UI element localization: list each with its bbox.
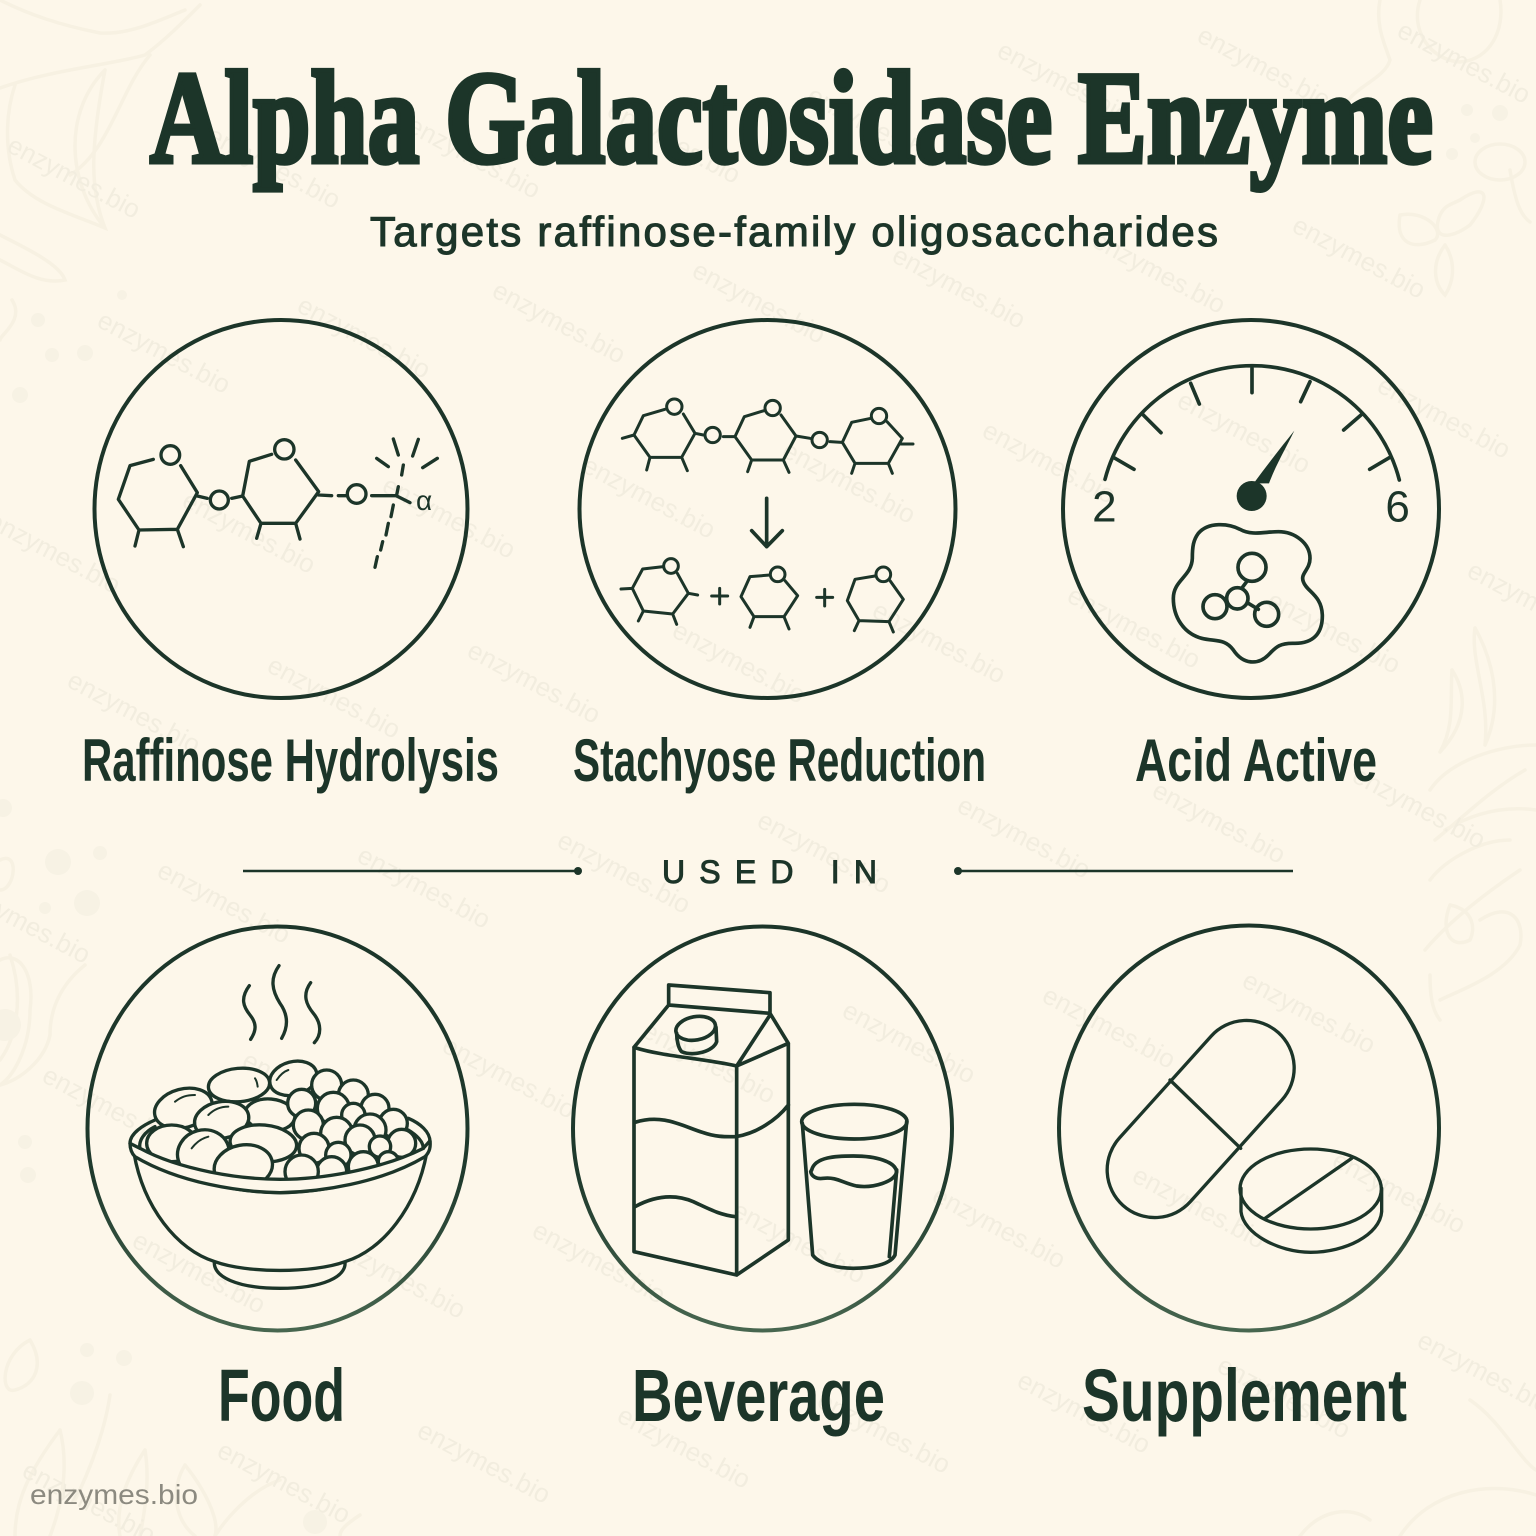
panel: supplement [1059,926,1439,1437]
ring: acid active [1063,320,1439,698]
text: enzymes.bio [578,450,721,545]
text: enzymes.bio [1328,1145,1471,1240]
panel: food [88,926,468,1437]
panel: acid active [1063,320,1439,794]
heading: used in: USED IN [662,854,877,890]
text: enzymes.bio [63,665,206,760]
ring: food [88,926,468,1330]
text: enzymes.bio [3,130,146,225]
divider: used in [243,854,1293,890]
text: enzymes.bio [1238,965,1381,1060]
text: enzymes.bio [1148,775,1291,870]
text: enzymes.bio [803,80,946,175]
text: enzymes.bio [1088,225,1231,320]
text: enzymes.bio [128,1225,271,1320]
text: enzymes.bio [1063,580,1206,675]
text: enzymes.bio [638,1015,781,1110]
text: enzymes.bio [868,595,1011,690]
text: enzymes.bio [1128,1160,1271,1255]
icon: pH gauge with enzyme: 2 [1092,482,1117,531]
text: enzymes.bio [668,615,811,710]
text: enzymes.bio [838,995,981,1090]
text: enzymes.bio [993,35,1136,130]
text: enzymes.bio [1173,385,1316,480]
text: enzymes.bio [488,275,631,370]
text: enzymes.bio [1013,1365,1156,1460]
label: supplement: Supplement [1082,1354,1407,1437]
text: enzymes.bio [1263,585,1406,680]
icon: bowl of beans [130,966,430,1288]
text: enzymes.bio [1038,980,1181,1075]
text: enzymes.bio [978,415,1121,510]
panel: stachyose reduction [573,320,986,794]
icon: raffinose molecule with alpha cleavage [118,439,437,567]
footer brand: enzymes.bio [30,1479,198,1510]
label: acid active: Acid Active [1135,727,1377,794]
icon: carton and glass [634,985,907,1275]
text: enzymes.bio [1288,210,1431,305]
text: enzymes.bio [613,1400,756,1495]
text: enzymes.bio [93,305,236,400]
ring: stachyose reduction [580,320,956,698]
text: enzymes.bio [1213,1350,1356,1445]
text: enzymes.bio [888,240,1031,335]
text: enzymes.bio [813,1385,956,1480]
text: enzymes.bio [378,470,521,565]
text: enzymes.bio [178,485,321,580]
text: enzymes.bio [553,825,696,920]
subtitle: Targets raffinose-family oligosaccharides [370,208,1218,255]
text: enzymes.bio [353,840,496,935]
text: enzymes.bio [728,1195,871,1290]
text: enzymes.bio [203,120,346,215]
ring: supplement [1059,926,1439,1330]
text: enzymes.bio [1393,15,1536,110]
text: enzymes.bio [753,805,896,900]
label: food: Food [218,1354,345,1437]
text: enzymes.bio [38,1060,181,1155]
text: enzymes.bio [293,290,436,385]
panel: raffinose hydrolysis [82,320,499,794]
text: enzymes.bio [928,1180,1071,1275]
label: beverage: Beverage [632,1354,885,1437]
text: enzymes.bio [153,855,296,950]
label: stachyose reduction: Stachyose Reduction [573,727,986,794]
icon: raffinose molecule with alpha cleavage: α [416,485,432,516]
text: enzymes.bio [778,435,921,530]
panel: beverage [573,926,952,1437]
label: raffinose hydrolysis: Raffinose Hydrolysis [82,727,499,794]
text: enzymes.bio [403,110,546,205]
ring: beverage [573,926,952,1330]
text: enzymes.bio [603,95,746,190]
ring: raffinose hydrolysis [94,320,468,698]
text: enzymes.bio [1373,370,1516,465]
icon: pH gauge with enzyme: 6 [1385,482,1410,531]
icon: capsule and tablet [1088,1001,1382,1252]
text: enzymes.bio [263,650,406,745]
text: enzymes.bio [463,635,606,730]
text: enzymes.bio [238,1045,381,1140]
icon: stachyose split into sugars [621,399,913,632]
text: enzymes.bio [328,1230,471,1325]
text: enzymes.bio [1193,20,1336,115]
icon: pH gauge with enzyme [1092,366,1410,662]
text: enzymes.bio [528,1215,671,1310]
text: enzymes.bio [688,255,831,350]
text: enzymes.bio [1348,760,1491,855]
text: enzymes.bio [213,1435,356,1530]
text: enzymes.bio [953,790,1096,885]
text: enzymes.bio [413,1415,556,1510]
text: enzymes.bio [438,1030,581,1125]
